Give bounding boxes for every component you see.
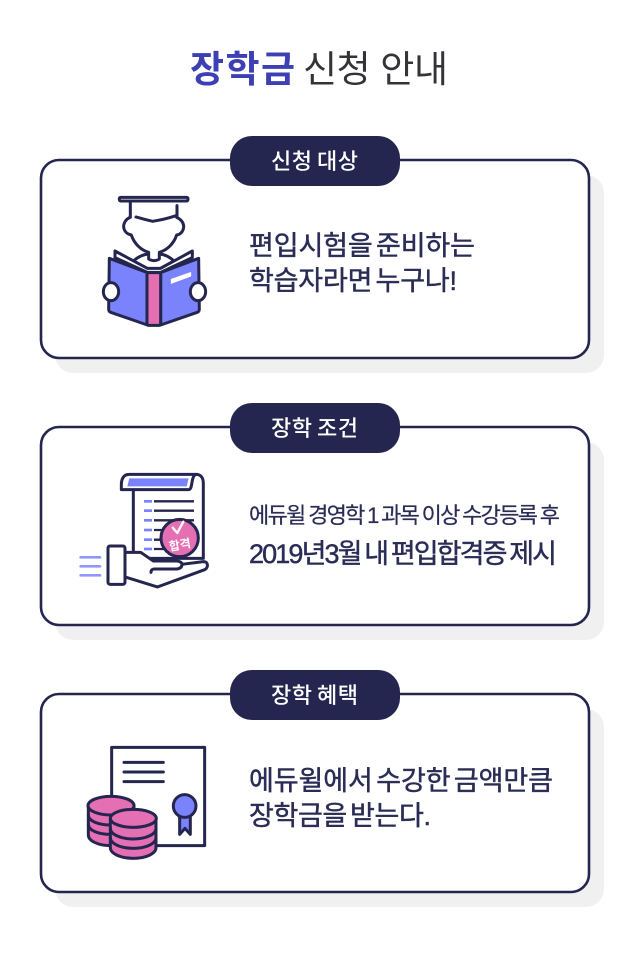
text: 장학 조건 설명: 2019년3월 내 편입합격증 제시	[249, 539, 557, 569]
text: 장학 혜택 설명: 장학금을 받는다.	[249, 801, 431, 831]
icon: hand holding certificate of acceptance	[81, 474, 207, 587]
badge: 신청 대상: 신청 대상	[271, 149, 358, 174]
panel: 장학 혜택	[41, 670, 604, 907]
badge: 신청 대상	[230, 136, 400, 186]
text: 장학 조건 설명	[249, 503, 560, 569]
badge: 장학 조건: 장학 조건	[271, 416, 358, 441]
text: 장학 혜택 설명: 에듀윌에서 수강한 금액만큼	[249, 766, 553, 796]
title: 신청 안내	[303, 49, 448, 90]
badge: 장학 혜택: 장학 혜택	[271, 683, 358, 708]
text: 장학 조건 설명: 에듀윌 경영학 1 과목 이상 수강등록 후	[249, 503, 560, 528]
text: 신청 대상 설명	[249, 231, 475, 296]
title	[190, 49, 448, 90]
badge: 장학 조건	[230, 403, 400, 453]
text: 신청 대상 설명: 학습자라면 누구나!	[249, 266, 457, 296]
title: 장학금	[190, 49, 295, 90]
icon: certificate and coin stacks	[88, 747, 205, 858]
icon: student reading book	[103, 197, 206, 325]
badge: 장학 혜택	[230, 670, 400, 720]
text: 장학 혜택 설명	[249, 766, 553, 831]
text: 신청 대상 설명: 편입시험을 준비하는	[249, 231, 475, 261]
icon: hand holding certificate of acceptance: 합격	[168, 535, 192, 554]
panel: 장학 조건	[41, 403, 604, 640]
panel: 신청 대상	[41, 136, 604, 373]
